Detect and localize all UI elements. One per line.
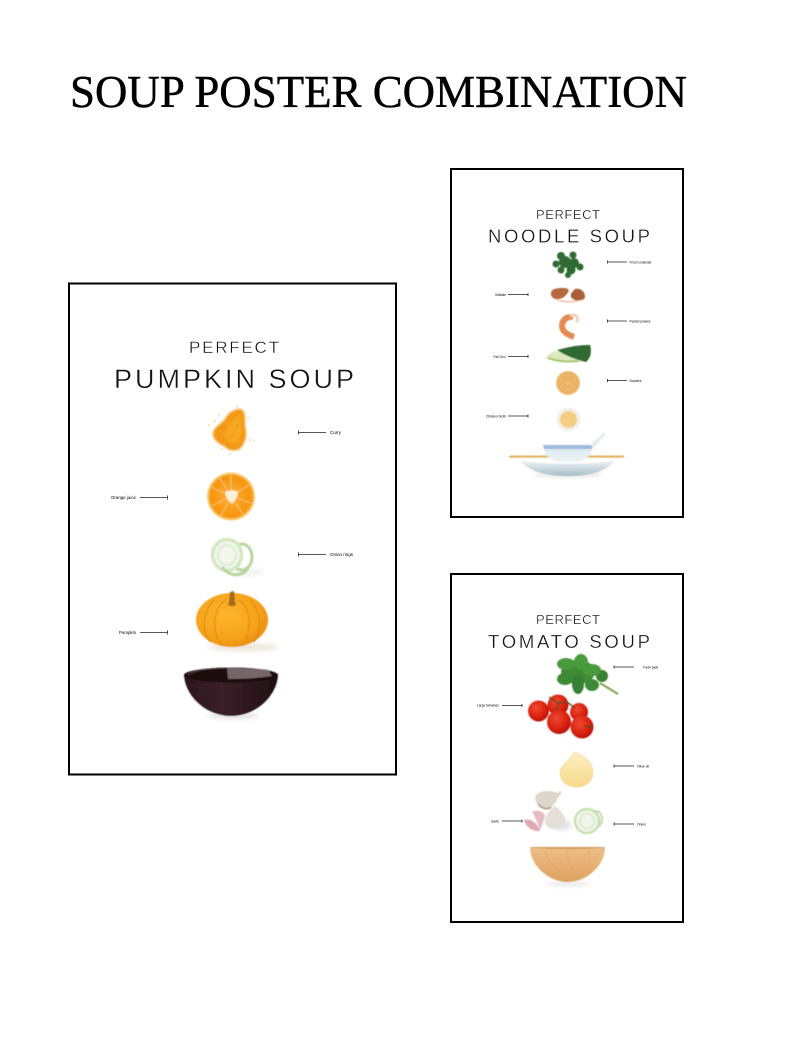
- label: shiitake: Shiitake: [495, 292, 507, 297]
- label: garlic: Garlic: [491, 818, 499, 824]
- heading: perfect noodle soup: PERFECT: [536, 207, 600, 222]
- label: fresh coriander: Fresh coriander: [630, 260, 652, 264]
- label: pak choi: Pak Choi: [494, 354, 506, 359]
- label: fresh basil: Fresh basil: [643, 664, 658, 670]
- icon: fresh coriander: [552, 252, 584, 278]
- label: fresh coriander: [608, 260, 652, 264]
- label: shiitake: [495, 292, 528, 297]
- heading: perfect pumpkin soup: PUMPKIN SOUP: [114, 364, 354, 394]
- label: curry: [298, 430, 342, 436]
- label: large tomatoes: [477, 702, 522, 708]
- label: olive oil: [614, 764, 649, 768]
- icon: onion rings: [212, 540, 264, 575]
- icon: large tomatoes: [528, 694, 594, 738]
- label: chicken broth: Chicken broth: [486, 414, 506, 418]
- label: peeled prawns: Peeled prawns: [630, 318, 650, 324]
- label: orange juice: [111, 495, 168, 501]
- label: fresh basil: [614, 664, 658, 670]
- heading: perfect tomato soup: PERFECT: [536, 612, 600, 627]
- label: onion rings: [298, 552, 354, 558]
- icon: orange slice: [207, 472, 255, 520]
- label: pumpkin: [119, 630, 168, 636]
- heading: perfect tomato soup: TOMATO SOUP: [488, 631, 650, 652]
- icon: pumpkin: [196, 591, 279, 651]
- icon: garlic: [524, 790, 571, 831]
- icon: onion: [575, 809, 602, 833]
- panel: tomato soup poster: [451, 574, 683, 922]
- panel: noodle soup poster: [451, 169, 683, 517]
- label: noodles: [608, 378, 642, 383]
- icon: wooden bowl: [530, 847, 605, 886]
- icon: dark bowl: [184, 668, 278, 718]
- label: orange juice: Orange juice: [111, 495, 136, 501]
- heading: perfect noodle soup: NOODLE SOUP: [488, 226, 650, 246]
- icon: shiitake: [551, 288, 585, 303]
- label: pak choi: [494, 354, 528, 359]
- label: curry: Curry: [330, 430, 342, 436]
- label: chicken broth: [486, 414, 528, 418]
- panel: pumpkin soup poster: [69, 284, 396, 774]
- icon: chicken broth: [556, 408, 580, 432]
- label: olive oil: Olive oil: [637, 764, 649, 768]
- label: pumpkin: Pumpkin: [119, 630, 136, 636]
- icon: fresh basil: [557, 654, 618, 694]
- icon: noodles: [556, 371, 580, 395]
- label: onion: Onion: [637, 822, 646, 826]
- label: large tomatoes: Large tomatoes: [477, 702, 499, 708]
- label: onion: [614, 822, 646, 826]
- icon: pak choi: [546, 345, 591, 363]
- heading: perfect pumpkin soup: PERFECT: [189, 338, 279, 357]
- label: noodles: Noodles: [630, 378, 642, 383]
- label: onion rings: Onion rings: [330, 552, 354, 558]
- title: SOUP POSTER COMBINATION: [70, 67, 687, 117]
- icon: curry powder: [208, 406, 255, 455]
- heading: perfect noodle soup: [488, 207, 650, 246]
- label: peeled prawns: [608, 318, 650, 324]
- heading: perfect tomato soup: [488, 612, 650, 652]
- heading: perfect pumpkin soup: [114, 338, 354, 394]
- icon: noodle bowl with plate and chopsticks: [509, 432, 624, 476]
- icon: olive oil drop: [560, 752, 593, 787]
- label: garlic: [491, 818, 522, 824]
- icon: peeled prawn: [562, 315, 578, 337]
